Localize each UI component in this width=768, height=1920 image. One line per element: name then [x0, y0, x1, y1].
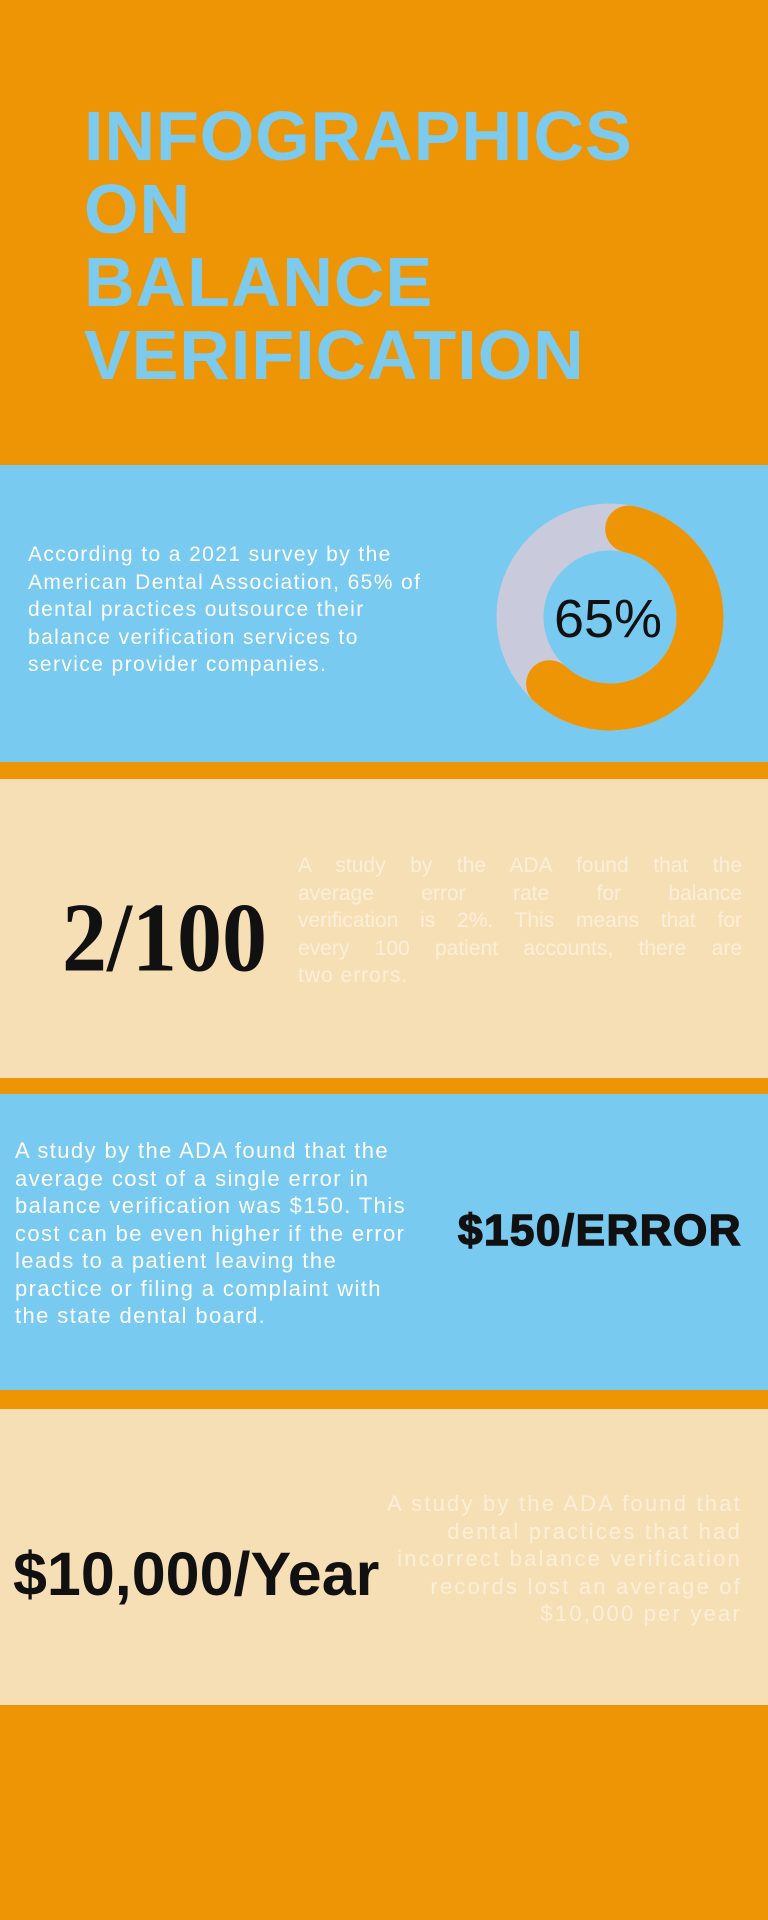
- text block: survey: [28, 543, 421, 676]
- donut chart: 65%: 65%: [554, 589, 662, 649]
- stat: $150/ERROR: $150/ERROR: [458, 1206, 742, 1255]
- text block: error rate: A study by the ADA found that the: [298, 854, 742, 877]
- title: VERIFICATION: [84, 316, 585, 394]
- text block: survey: service provider companies.: [28, 653, 327, 676]
- text block: error rate: [298, 854, 742, 987]
- panel: 65% outsource: [0, 465, 768, 762]
- text block: annual loss: A study by the ADA found that: [387, 1491, 742, 1516]
- text block: error rate: average error rate for balance: [298, 882, 742, 904]
- text block: annual loss: incorrect balance verification: [397, 1546, 742, 1571]
- title: [84, 97, 633, 394]
- donut chart: 65%: [496, 504, 724, 730]
- text block: annual loss: [387, 1491, 742, 1626]
- text block: cost: practice or filing a complaint with: [15, 1276, 382, 1300]
- text block: cost: balance verification was $150. This: [15, 1193, 406, 1218]
- stat: $10,000/Year: $10,000/Year: [13, 1540, 379, 1608]
- text block: survey: American Dental Association, 65% of: [28, 570, 421, 594]
- text block: cost: average cost of a single error in: [15, 1166, 369, 1190]
- text block: error rate: two errors.: [298, 964, 408, 987]
- text block: survey: According to a 2021 survey by the: [28, 543, 392, 566]
- text block: cost: [15, 1138, 406, 1328]
- text block: cost: the state dental board.: [15, 1303, 266, 1328]
- text block: cost: leads to a patient leaving the: [15, 1248, 337, 1273]
- title: INFOGRAPHICS: [84, 97, 633, 175]
- panel: annual loss: [0, 1409, 768, 1705]
- text block: annual loss: records lost an average of: [430, 1574, 742, 1598]
- title: ON: [84, 170, 191, 248]
- text block: error rate: every 100 patient accounts, there are: [298, 936, 742, 960]
- text block: cost: A study by the ADA found that the: [15, 1138, 389, 1163]
- stat: 2/100: 2/100: [62, 884, 267, 992]
- text block: annual loss: dental practices that had: [447, 1518, 742, 1544]
- panel: error rate: [0, 779, 768, 1078]
- panel: cost per error: [0, 1094, 768, 1390]
- text block: survey: balance verification services to: [28, 626, 359, 648]
- text block: survey: dental practices outsource their: [28, 598, 365, 621]
- text block: annual loss: $10,000 per year: [540, 1601, 742, 1626]
- text block: cost: cost can be even higher if the error: [15, 1220, 405, 1246]
- title: BALANCE: [84, 243, 433, 321]
- text block: error rate: verification is 2%. This means that for: [298, 909, 742, 932]
